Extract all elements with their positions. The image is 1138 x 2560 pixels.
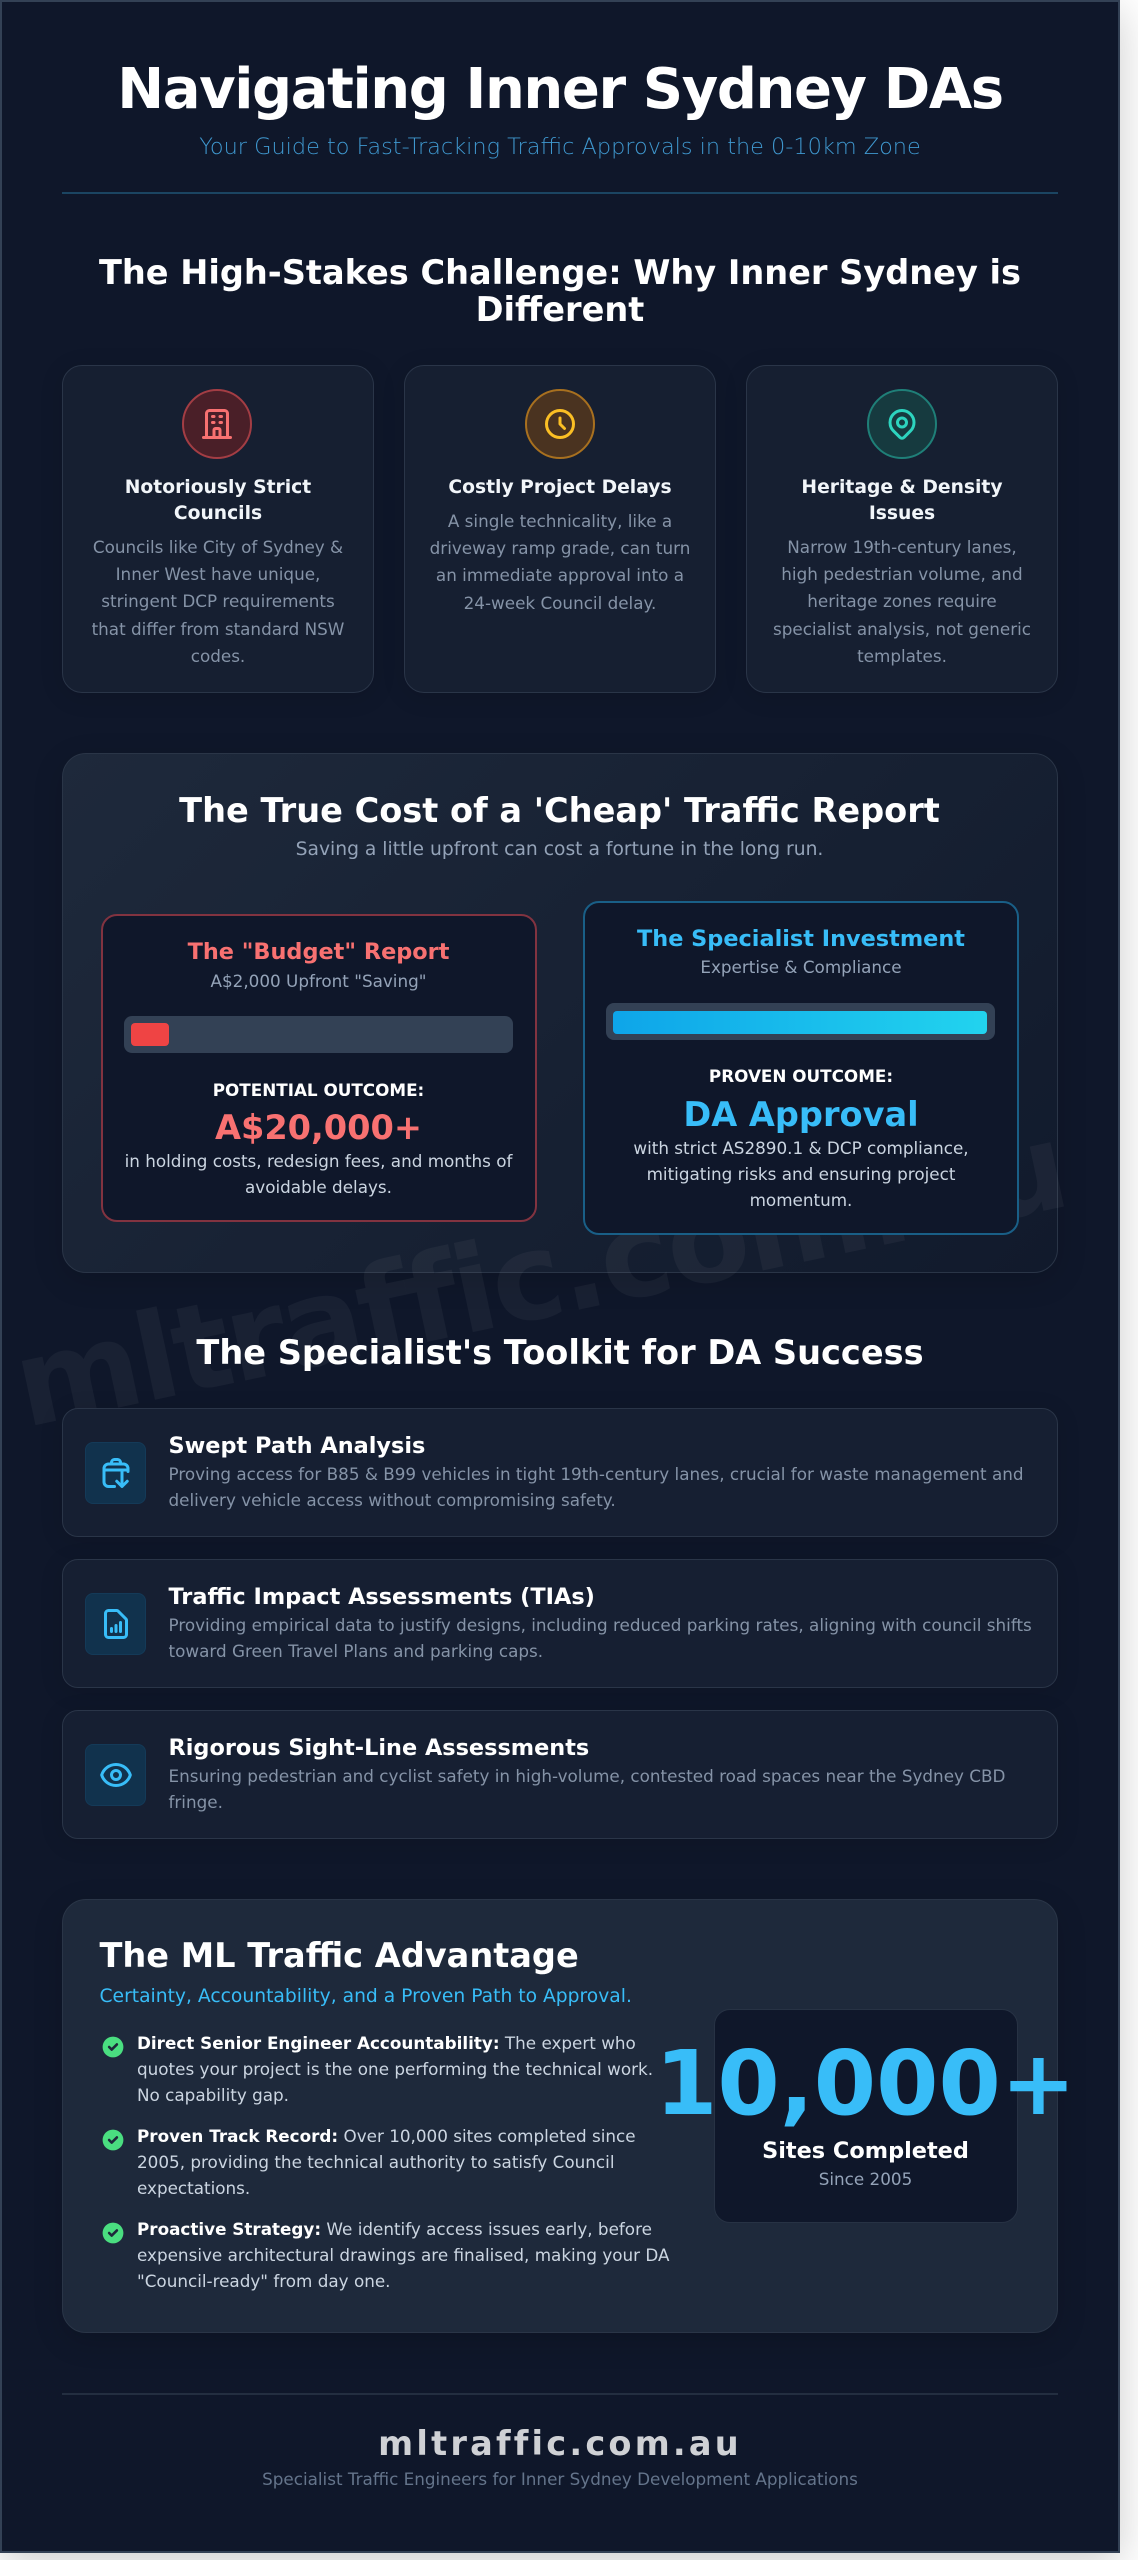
card text: project delays: A single technicality, like a (448, 511, 672, 531)
panel: project delays (404, 365, 716, 693)
stat note: Since 2005 (819, 2169, 912, 2189)
outcome value: budget: A$20,000+ (215, 1108, 422, 1147)
panel: heritage (746, 365, 1058, 693)
heading: advantage: The ML Traffic Advantage (100, 1936, 579, 1975)
icon: eye (85, 1744, 146, 1806)
card text: project delays (430, 511, 690, 613)
section heading: toolkit: The Specialist's Toolkit for DA Success (196, 1333, 924, 1372)
item text: traffic impact: toward Green Travel Plans and parking caps. (168, 1641, 543, 1661)
card text: heritage: templates. (857, 646, 947, 666)
card text: strict councils: stringent DCP requirements (101, 591, 335, 611)
heading: true cost: The True Cost of a 'Cheap' Traffic Report (179, 791, 940, 830)
outcome text: budget (125, 1151, 513, 1197)
specialist title: The Specialist Investment (637, 926, 965, 952)
budget subtitle: A$2,000 Upfront "Saving" (210, 971, 426, 991)
outcome text: budget: avoidable delays. (245, 1177, 392, 1197)
card text: strict councils: Councils like City of Sydney & (93, 537, 343, 557)
list item: track record: expectations. (137, 2178, 250, 2198)
title: Navigating Inner Sydney DAs (117, 57, 1003, 122)
card text: heritage: heritage zones require (807, 591, 997, 611)
panel: sight-line (62, 1710, 1058, 1839)
budget title: The "Budget" Report (188, 939, 449, 965)
panel: ML Traffic advantage (62, 1899, 1058, 2333)
item text: traffic impact (168, 1615, 1032, 1661)
card title: strict councils: Notoriously Strict (125, 477, 311, 498)
outcome label: specialist: PROVEN OUTCOME: (709, 1066, 893, 1086)
outcome text: specialist: with strict AS2890.1 & DCP compliance, (633, 1138, 969, 1158)
item text: sight-line: Ensuring pedestrian and cyclist safety in high-volume, contested road spaces near the Sydney CBD (168, 1766, 1005, 1786)
item text: swept path: delivery vehicle access without compromising safety. (168, 1490, 616, 1510)
list item: track record: 2005, providing the technical authority to satisfy Council (137, 2152, 614, 2172)
panel: strict councils (62, 365, 374, 693)
stat label: Sites Completed (762, 2138, 969, 2164)
outcome label: budget: POTENTIAL OUTCOME: (213, 1080, 424, 1100)
list item: proactive strategy (137, 2219, 670, 2291)
icon: building (182, 389, 252, 459)
subheading: true cost: Saving a little upfront can cost a fortune in the long run. (296, 839, 823, 860)
icon: document chart (85, 1593, 146, 1655)
outcome text: budget: in holding costs, redesign fees, and months of (125, 1151, 512, 1171)
footer (62, 2393, 1058, 2489)
item title: swept path: Swept Path Analysis (168, 1433, 425, 1459)
subtitle: Your Guide to Fast-Tracking Traffic Approvals in the 0-10km Zone (199, 134, 921, 160)
watermark: mltraffic.com.au (3, 1097, 1077, 1456)
card text: strict councils: codes. (191, 646, 245, 666)
check icon 2 (102, 2130, 124, 2150)
bar: budget (124, 1016, 512, 1053)
card title: strict councils (125, 477, 311, 524)
card title: project delays: Costly Project Delays (448, 477, 672, 498)
bar: specialist (606, 1003, 995, 1040)
card title: heritage: Issues (869, 503, 935, 524)
item text: sight-line (168, 1766, 1005, 1812)
card text: project delays: 24-week Council delay. (464, 593, 656, 613)
outcome text: specialist (633, 1138, 969, 1210)
card text: strict councils (92, 537, 344, 666)
item title: traffic impact: Traffic Impact Assessments (TIAs) (168, 1584, 595, 1610)
stat number: 10,000+ (655, 2032, 1076, 2136)
card title: strict councils: Councils (174, 503, 262, 524)
icon: swept path (85, 1442, 146, 1504)
panel: swept path (62, 1408, 1058, 1537)
icon: map pin (866, 389, 936, 459)
bar fill: budget (130, 1023, 168, 1046)
list item: track record: Proven Track Record: Over 10,000 sites completed since (137, 2126, 636, 2146)
item text: swept path (168, 1464, 1024, 1510)
list item: accountability: Direct Senior Engineer Accountability: The expert who (137, 2033, 636, 2053)
card text: heritage: high pedestrian volume, and (781, 564, 1023, 584)
item text: swept path: Proving access for B85 & B99 vehicles in tight 19th-century lanes, crucial for waste management and (168, 1464, 1024, 1484)
list item: track record (137, 2126, 636, 2198)
bar fill: specialist (613, 1011, 987, 1034)
card text: strict councils: that differ from standard NSW (92, 619, 344, 639)
card title: heritage (801, 477, 1003, 524)
section heading: challenge (99, 253, 1021, 329)
card text: heritage: Narrow 19th-century lanes, (787, 537, 1017, 557)
header (62, 57, 1058, 194)
section heading: challenge: Different (476, 290, 644, 329)
list item: proactive strategy: "Council-ready" from day one. (137, 2271, 391, 2291)
outcome text: specialist: momentum. (750, 1190, 852, 1210)
card text: strict councils: Inner West have unique, (116, 564, 320, 584)
panel: specialist investment (583, 901, 1019, 1235)
header rule (62, 192, 1058, 194)
check icon 1 (102, 2036, 124, 2058)
card text: project delays: driveway ramp grade, can turn (430, 538, 690, 558)
specialist subtitle: Expertise & Compliance (700, 957, 902, 977)
list item: proactive strategy: expensive architectural drawings are finalised, making your DA (137, 2245, 670, 2265)
card text: heritage: specialist analysis, not generic (773, 619, 1031, 639)
footer brand: mltraffic.com.au (378, 2424, 742, 2463)
footer rule (62, 2393, 1058, 2395)
subheading: advantage: Certainty, Accountability, and a Proven Path to Approval. (100, 1986, 632, 2007)
outcome value: specialist: DA Approval (683, 1095, 919, 1134)
card text: heritage (773, 537, 1031, 666)
list item: accountability: quotes your project is the one performing the technical work. (137, 2059, 653, 2079)
item text: traffic impact: Providing empirical data to justify designs, including reduced parking rates, aligning with council shifts (168, 1615, 1032, 1635)
panel: budget report (100, 914, 536, 1222)
check icon 3 (102, 2222, 124, 2244)
stat panel (714, 2009, 1018, 2223)
outcome text: specialist: mitigating risks and ensuring project (647, 1164, 955, 1184)
list item: accountability: No capability gap. (137, 2085, 289, 2105)
icon: clock (524, 389, 594, 459)
section heading: challenge: The High-Stakes Challenge: Why Inner Sydney is (99, 253, 1021, 292)
item text: sight-line: fringe. (168, 1792, 223, 1812)
footer tagline: Specialist Traffic Engineers for Inner Sydney Development Applications (262, 2469, 858, 2489)
card title: heritage: Heritage & Density (801, 477, 1003, 498)
list item: accountability (137, 2033, 653, 2105)
item title: sight-line: Rigorous Sight-Line Assessments (168, 1735, 589, 1761)
list item: proactive strategy: Proactive Strategy: We identify access issues early, before (137, 2219, 652, 2239)
panel: traffic impact (62, 1559, 1058, 1688)
panel: true cost (62, 753, 1058, 1273)
card text: project delays: an immediate approval into a (436, 565, 684, 585)
